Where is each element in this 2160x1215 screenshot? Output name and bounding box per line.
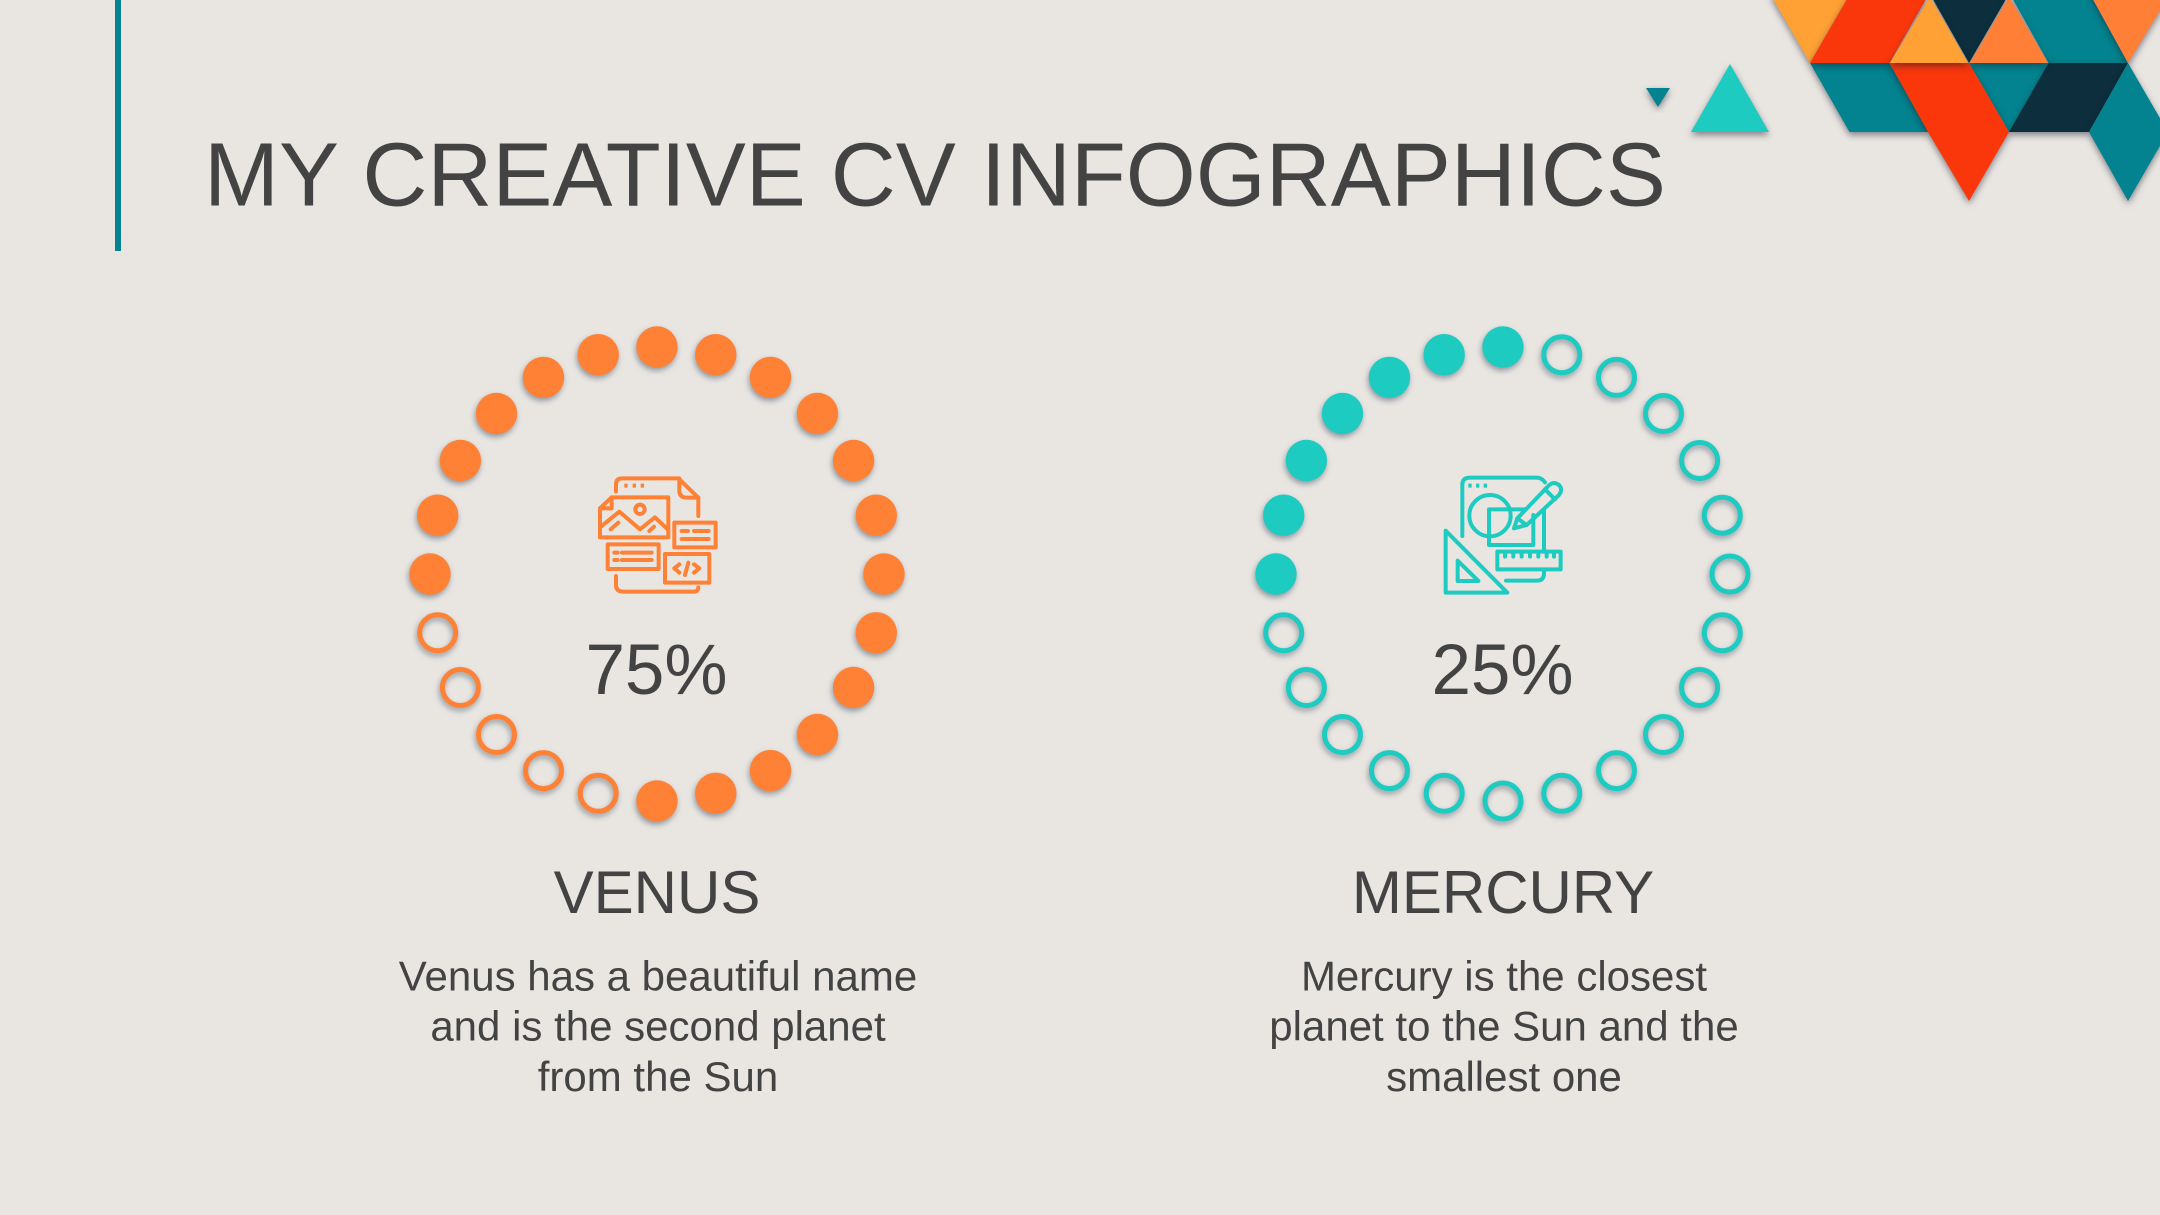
heading: venus: VENUS xyxy=(554,859,760,926)
description: mercury: Mercury is the closest xyxy=(1301,952,1707,1000)
percentage: 75%: 75% xyxy=(585,631,728,710)
title: MY CREATIVE CV INFOGRAPHICS xyxy=(204,126,1666,226)
accent bar xyxy=(115,0,121,251)
icon: design tools xyxy=(1446,478,1561,593)
turquoise triangle xyxy=(1691,64,1769,132)
description: venus: from the Sun xyxy=(538,1053,778,1100)
panel: venus xyxy=(399,326,917,1100)
dot ring: mercury 25% xyxy=(1255,326,1748,819)
panel: mercury xyxy=(1255,326,1748,1100)
description: mercury: planet to the Sun and the xyxy=(1269,1002,1739,1050)
heading: mercury: MERCURY xyxy=(1352,859,1654,926)
percentage: 25%: 25% xyxy=(1431,631,1574,710)
description: mercury: smallest one xyxy=(1386,1053,1622,1100)
small teal triangle xyxy=(1646,88,1670,107)
icon: web design document xyxy=(600,478,716,592)
geometric triangle mosaic xyxy=(1770,0,2160,201)
description: venus: Venus has a beautiful name xyxy=(399,952,917,1000)
dot ring: venus 75% xyxy=(409,326,905,822)
description: venus: and is the second planet xyxy=(430,1002,886,1050)
